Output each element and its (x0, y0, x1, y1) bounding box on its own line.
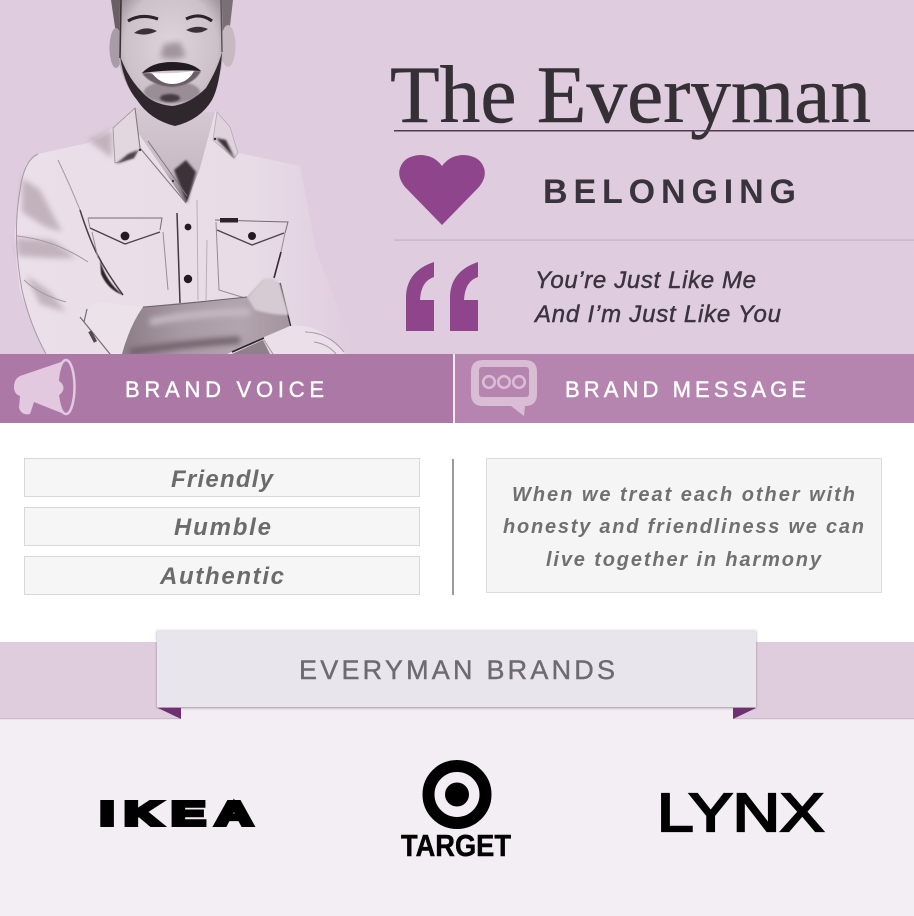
right pocket (215, 220, 288, 298)
quote text (533, 267, 781, 328)
section divider (394, 240, 914, 241)
shirt placket (177, 213, 180, 303)
lower face shading (144, 81, 200, 103)
title: The Everyman (390, 49, 871, 140)
brands band (0, 642, 914, 719)
item: humble: Humble (174, 514, 271, 541)
logo: target (401, 766, 511, 863)
brands section background (0, 719, 914, 916)
logo: target: TARGET (401, 828, 511, 863)
neck (135, 108, 215, 203)
ribbon: everyman brands heading (157, 630, 756, 719)
eyes and brows (128, 16, 212, 21)
face (119, 0, 223, 122)
chin patch (160, 94, 180, 102)
item: friendly: Friendly (171, 466, 275, 493)
man's head (110, 0, 236, 126)
collar (113, 108, 140, 163)
label: brand voice: BRAND VOICE (125, 377, 324, 402)
brand message box (486, 458, 882, 592)
lower forearm (232, 340, 270, 354)
icon: megaphone (14, 360, 74, 414)
icon: heart (399, 155, 485, 225)
header background (0, 0, 914, 354)
cuff on left arm (80, 302, 143, 354)
beard (120, 52, 222, 126)
item: authentic: Authentic (159, 563, 284, 590)
moustache (142, 62, 201, 73)
logo: ikea: IKEA (100, 796, 262, 833)
quote text: And I’m Just Like You (533, 301, 781, 328)
icon: quotation marks (406, 262, 478, 331)
ribbon fold right (733, 708, 756, 719)
brand message box: live together in harmony (546, 549, 822, 571)
item: friendly (24, 458, 420, 496)
ribbon fold left (158, 708, 181, 719)
item: humble (24, 508, 420, 546)
label: brand message: BRAND MESSAGE (565, 377, 806, 402)
heading: EVERYMAN BRANDS (299, 655, 615, 685)
right sleeve cuff (264, 326, 345, 354)
right arm shadow (274, 252, 291, 328)
brand voice list (24, 458, 420, 594)
vertical divider (452, 459, 454, 595)
portrait: smiling man with crossed arms (14, 0, 352, 354)
left sleeve outline (16, 154, 46, 354)
teeth (152, 71, 194, 84)
mouth corners (142, 71, 201, 87)
panel: brand voice band (0, 354, 453, 423)
man's shirt body (14, 108, 352, 354)
crossed forearm (122, 280, 290, 354)
left pocket (88, 218, 168, 290)
ears (110, 28, 122, 68)
icon: speech bubble (471, 360, 537, 416)
panel: brand message band (455, 354, 914, 423)
item: authentic (24, 556, 420, 594)
hair (111, 0, 124, 38)
heading: belonging: BELONGING (543, 173, 796, 211)
title underline (394, 130, 914, 132)
brand message box: When we treat each other with (512, 484, 855, 506)
shirt buttons (121, 224, 256, 283)
nose shadow (160, 42, 186, 59)
brand message box: honesty and friendliness we can (503, 516, 864, 538)
quote text: You’re Just Like Me (535, 267, 756, 294)
panel divider (453, 354, 455, 423)
logo: lynx: LYNX (657, 783, 824, 843)
